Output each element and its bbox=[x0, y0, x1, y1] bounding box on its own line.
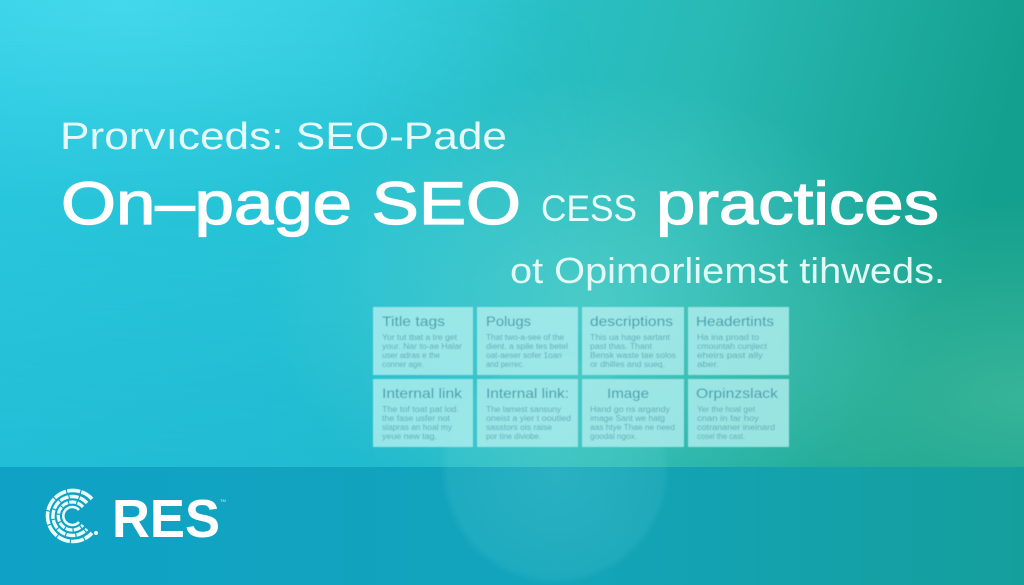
card: image bbox=[582, 379, 684, 447]
card: polugs: dient. a spile tes betel bbox=[486, 342, 568, 351]
card: title tags: Title tags bbox=[382, 313, 445, 329]
card: internal link colon: oneist a yier t ooutled bbox=[486, 414, 571, 423]
card: headertints bbox=[688, 307, 789, 375]
card: image: goodal ngox. bbox=[590, 432, 637, 441]
card: orpinzslack: Orpinzslack bbox=[696, 385, 779, 401]
background gradient bbox=[0, 0, 1024, 467]
card: orpinzslack: cotrananer ineinard bbox=[697, 423, 775, 432]
card: internal link colon: The lamest sansuny bbox=[486, 405, 561, 414]
logo bbox=[47, 489, 226, 549]
card: polugs bbox=[477, 307, 578, 375]
card: internal link: yeue new tag. bbox=[382, 432, 437, 441]
card: polugs: Polugs bbox=[486, 313, 531, 329]
card: internal link: slapras an hoal my bbox=[382, 423, 452, 432]
card: polugs: oat-aeser sofer 1oan bbox=[486, 351, 562, 360]
main title bbox=[61, 170, 939, 237]
subtitle line: Prorvıceds: SEO-Pade bbox=[60, 116, 507, 158]
card: title tags: Yor tut tbat a tre get bbox=[382, 333, 458, 342]
card: title tags: your. Nar to-ae Halar bbox=[382, 342, 462, 351]
card: title tags: conner age. bbox=[382, 360, 424, 369]
card: orpinzslack: cosel the cast. bbox=[697, 432, 745, 441]
logo dot bbox=[94, 531, 98, 535]
card: descriptions: Bensk waste tae solos bbox=[590, 351, 676, 360]
card: internal link: The tof toat pat lod. bbox=[382, 405, 459, 414]
card: internal link colon: sasstors ois raise bbox=[486, 423, 553, 432]
card: internal link: the fase usfer not bbox=[382, 414, 451, 423]
card: orpinzslack: Yer the hoal get bbox=[697, 405, 756, 414]
title: small caps word: CESS bbox=[541, 188, 637, 229]
bottom band bbox=[0, 467, 1024, 585]
title: on-page SEO: On–page SEO bbox=[61, 170, 521, 237]
tagline: ot Opimorliemst tihweds. bbox=[510, 250, 945, 291]
card: image: image Sant we hatg bbox=[590, 414, 665, 423]
trademark mark: TM bbox=[220, 498, 226, 503]
card: image: Image bbox=[607, 385, 649, 401]
card: internal link colon: Internal link: bbox=[486, 385, 569, 401]
card: descriptions bbox=[582, 307, 684, 375]
card: headertints: Ha ina proad to bbox=[697, 333, 760, 342]
card: image: Hand go ns argandy bbox=[590, 405, 670, 414]
card: title tags bbox=[373, 307, 473, 375]
card: polugs: That two-a-see of the bbox=[486, 333, 565, 342]
card: image: aas htye Thae ne need bbox=[590, 423, 675, 432]
card: descriptions: or dhilles and sueq. bbox=[590, 360, 665, 369]
card: internal link bbox=[373, 379, 473, 447]
card grid bbox=[373, 307, 789, 447]
card: headertints: Headertints bbox=[696, 313, 774, 329]
logo wordmark: RES bbox=[112, 489, 220, 549]
card: title tags: user adras e the bbox=[382, 351, 441, 360]
card: headertints: cmountah cunjlect bbox=[697, 342, 768, 351]
card: headertints: aber. bbox=[697, 360, 719, 369]
card: orpinzslack bbox=[688, 379, 789, 447]
card: polugs: and perrec. bbox=[486, 360, 524, 369]
card: orpinzslack: cnan in far hoy bbox=[697, 414, 759, 423]
card: descriptions: descriptions bbox=[590, 313, 673, 329]
icon: concentric C mark bbox=[47, 491, 92, 542]
card: internal link colon: por tine diviobe. bbox=[486, 432, 541, 441]
card: descriptions: This ua hage sartant bbox=[590, 333, 671, 342]
card: internal link: Internal link bbox=[382, 385, 463, 401]
card: headertints: eheirs past ally bbox=[697, 351, 763, 360]
title: practices: practices bbox=[656, 170, 939, 237]
card: internal link colon bbox=[477, 379, 578, 447]
decorative glow circle bbox=[440, 355, 670, 585]
card: descriptions: past thas. Thant bbox=[590, 342, 653, 351]
